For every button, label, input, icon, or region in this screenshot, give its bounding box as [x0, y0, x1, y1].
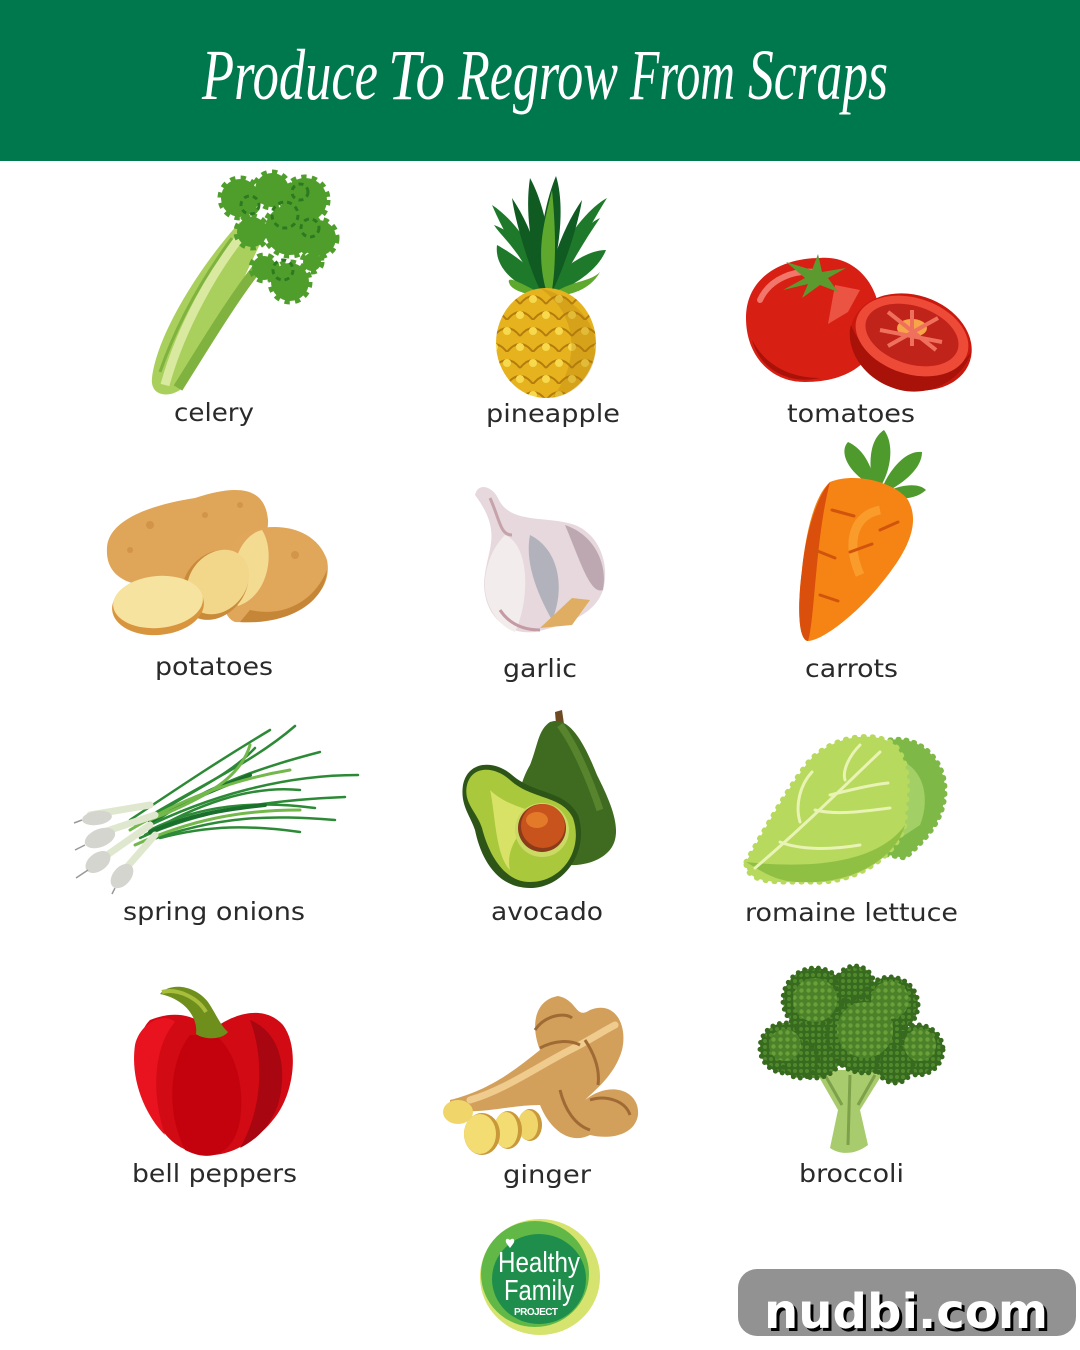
- label: avocado: avocado: [491, 897, 603, 926]
- icon: celery: [152, 173, 336, 394]
- label: broccoli: broccoli: [799, 1159, 904, 1188]
- icon: carrot: [799, 430, 926, 641]
- label: pineapple: pineapple: [486, 399, 620, 428]
- logo: Healthy Family Project: [480, 1219, 600, 1335]
- label: spring onions: spring onions: [123, 897, 305, 926]
- logo: Healthy Family Project: Healthy: [498, 1247, 580, 1279]
- icon: spring onions: [74, 726, 358, 894]
- label: romaine lettuce: romaine lettuce: [745, 898, 958, 927]
- icon: garlic: [475, 487, 605, 632]
- title: Regrow: [457, 35, 618, 115]
- icon: avocado: [462, 710, 616, 888]
- icon: potatoes: [107, 490, 328, 639]
- title: To: [388, 35, 445, 115]
- label: ginger: ginger: [503, 1160, 592, 1189]
- title: Produce: [201, 35, 378, 115]
- icon: tomatoes: [746, 254, 984, 406]
- icon: pineapple: [492, 176, 607, 398]
- icon: bell pepper: [134, 987, 293, 1156]
- title: [201, 35, 888, 115]
- watermark: nudbi.com: [764, 1284, 1048, 1340]
- icon: ginger: [443, 996, 638, 1155]
- label: carrots: carrots: [805, 654, 898, 683]
- title banner: [0, 0, 1080, 161]
- title: Scraps: [748, 35, 888, 115]
- watermark: [738, 1269, 1076, 1343]
- watermark: nudbi.com: [767, 1287, 1051, 1343]
- logo: Healthy Family Project: PROJECT: [514, 1307, 558, 1318]
- label: garlic: garlic: [503, 654, 577, 683]
- logo: Healthy Family Project: Family: [504, 1275, 574, 1307]
- icon: romaine lettuce: [746, 737, 945, 882]
- icon: broccoli: [760, 966, 943, 1153]
- label: celery: celery: [174, 398, 254, 427]
- label: potatoes: potatoes: [155, 652, 273, 681]
- title: From: [629, 35, 735, 115]
- label: bell peppers: bell peppers: [132, 1159, 297, 1188]
- label: tomatoes: tomatoes: [787, 399, 915, 428]
